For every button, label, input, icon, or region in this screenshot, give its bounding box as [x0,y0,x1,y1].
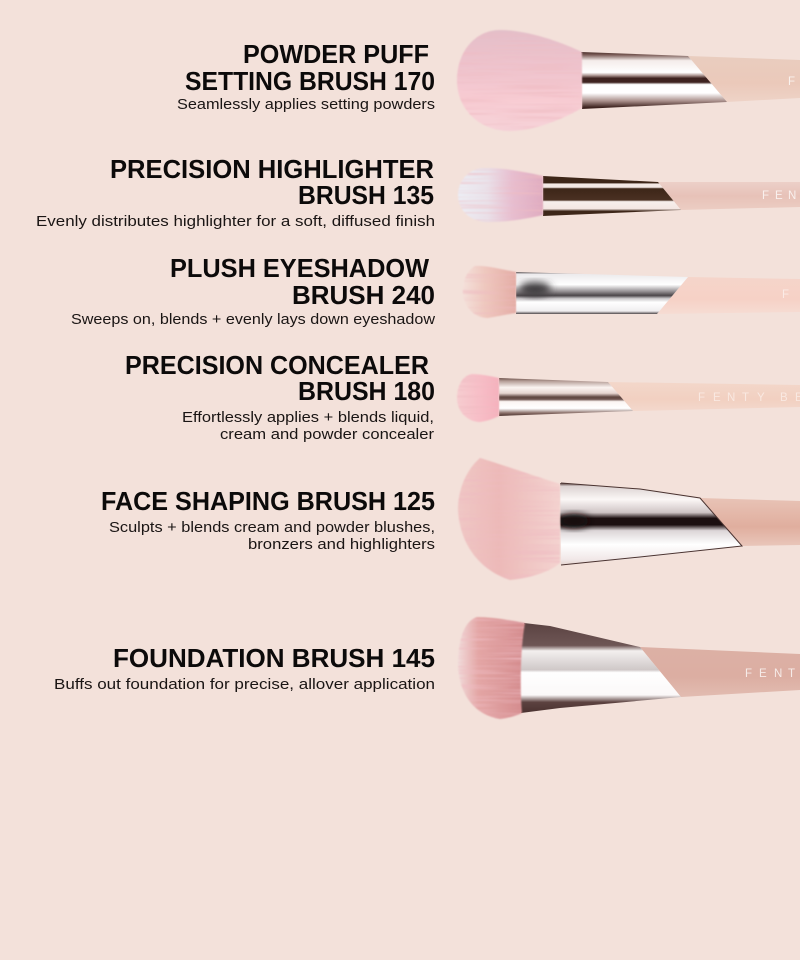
brush: powder puff setting brush 170 [457,30,800,131]
brush: precision highlighter brush 135 [458,168,800,222]
description: Buffs out foundation for precise, allover application [54,676,435,693]
bristles [457,374,499,422]
text block: precision concealer brush 180: cream and powder concealer [220,426,434,443]
text block: precision highlighter brush 135 [36,154,435,230]
text block: face shaping brush 125: bronzers and highlighters [248,536,435,553]
ferrule [543,176,681,216]
text block: plush eyeshadow brush 240: BRUSH 240 [292,280,435,310]
text block: foundation brush 145 [54,643,435,693]
text block: plush eyeshadow brush 240 [71,253,435,328]
handle [688,56,800,102]
ferrule [581,52,727,109]
bristles [463,266,516,318]
handle lettering: FENTY BE [698,392,800,404]
brush: precision concealer brush 180 [457,374,800,422]
text block: precision highlighter brush 135: BRUSH 135 [298,180,434,210]
heading: PRECISION CONCEALER [125,350,429,380]
text block: precision concealer brush 180 [125,350,435,443]
brush: plush eyeshadow brush 240 [463,266,800,318]
text block: precision concealer brush 180: BRUSH 180 [298,376,435,406]
handle [657,277,800,314]
heading: POWDER PUFF [243,39,429,69]
heading: FACE SHAPING BRUSH 125 [101,486,435,516]
description: Sweeps on, blends + evenly lays down eyeshadow [71,311,435,328]
ferrule [560,483,742,565]
description: Seamlessly applies setting powders [177,96,435,113]
text block: powder puff setting brush 170 [177,39,435,113]
handle lettering: FENT [745,668,795,680]
description: Sculpts + blends cream and powder blushes, [109,519,435,536]
ferrule [516,272,688,314]
bristles [458,458,560,580]
ferrule edge lines [561,483,742,565]
brush: face shaping brush 125 [458,458,800,580]
handle [640,647,800,697]
ferrule shadow [559,514,589,528]
bristles [458,168,543,222]
ferrule [519,623,681,713]
brush: foundation brush 145 [458,617,800,719]
ferrule shadow [519,282,551,296]
description: Evenly distributes highlighter for a soft, diffused finish [36,213,435,230]
handle lettering: F [788,76,795,88]
handle [608,382,800,411]
heading: FOUNDATION BRUSH 145 [113,643,435,673]
handle lettering: FEN [762,190,796,202]
bristles [457,30,582,131]
heading: PRECISION HIGHLIGHTER [110,154,434,184]
handle [700,498,800,546]
text block: face shaping brush 125 [101,486,435,553]
description: Effortlessly applies + blends liquid, [182,409,434,426]
ferrule [499,378,633,416]
handle [658,182,800,210]
bristles [458,617,525,719]
heading: PLUSH EYESHADOW [170,253,429,283]
handle lettering: F [782,289,789,301]
text block: powder puff setting brush 170: SETTING BRUSH 170 [185,66,435,96]
